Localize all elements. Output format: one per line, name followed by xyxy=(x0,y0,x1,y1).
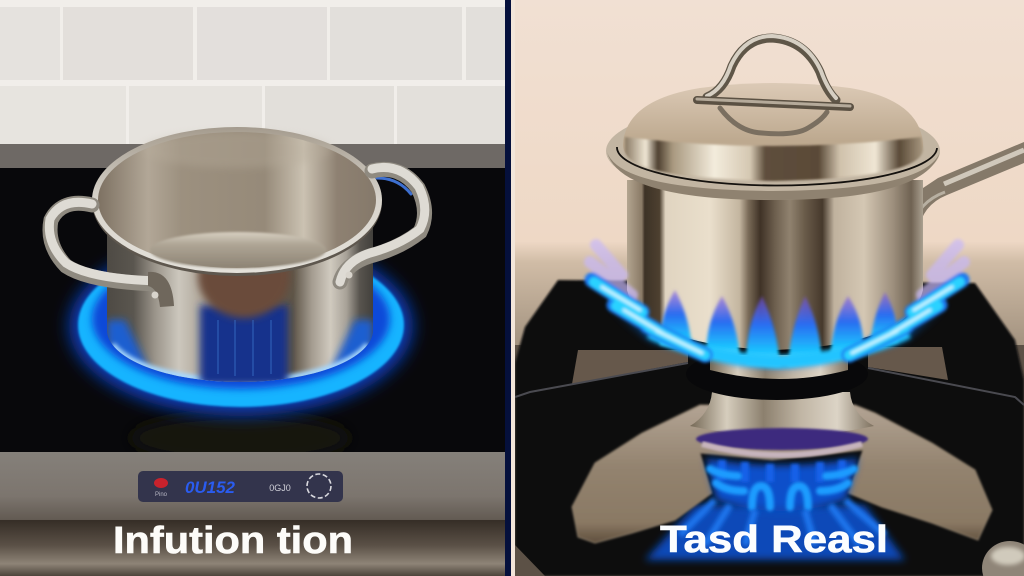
control display: Pino xyxy=(155,492,168,498)
cooktop reflection xyxy=(140,420,340,452)
pot body xyxy=(107,225,373,382)
caption: induction: Infution tion xyxy=(113,520,353,562)
burner base xyxy=(572,348,992,543)
caption: gas: Tasd Reasl xyxy=(660,519,888,561)
warm wall xyxy=(515,0,1024,345)
panel: induction cooktop xyxy=(0,0,507,576)
lower edge xyxy=(0,520,505,576)
lid xyxy=(606,36,940,200)
timer readout: 0U152 xyxy=(185,478,236,497)
burner neck xyxy=(690,392,874,436)
left flame leaves xyxy=(590,245,705,355)
pot interior xyxy=(98,132,376,268)
divider xyxy=(505,0,511,576)
lid rim xyxy=(606,127,940,200)
saucepan handle xyxy=(923,142,1024,216)
right flame leaves xyxy=(849,245,964,355)
pot: stainless steel pot xyxy=(49,127,425,385)
lower blue glow xyxy=(645,505,905,560)
pot rim xyxy=(94,197,382,276)
left handle xyxy=(49,202,158,284)
icon: stove knob xyxy=(982,541,1024,576)
tiled wall xyxy=(0,0,507,146)
lower flames xyxy=(680,458,885,545)
lid handle xyxy=(697,36,850,134)
central flames xyxy=(660,290,898,366)
cyan flame band xyxy=(650,332,908,362)
panel: gas stove xyxy=(515,0,1024,576)
flame ring xyxy=(590,245,964,368)
flame glow xyxy=(619,318,936,374)
burner grate xyxy=(515,280,1024,576)
lid dome xyxy=(623,83,923,153)
control display: 0GJ0 xyxy=(269,483,291,493)
icon: power button xyxy=(154,478,168,488)
right handle xyxy=(340,167,425,282)
saucepan body xyxy=(627,180,923,350)
control strip xyxy=(0,452,505,520)
counter edge xyxy=(0,144,505,169)
control display xyxy=(138,471,343,502)
induction ring glow xyxy=(69,236,413,416)
icon: dial xyxy=(307,474,331,498)
glass cooktop xyxy=(0,168,505,452)
